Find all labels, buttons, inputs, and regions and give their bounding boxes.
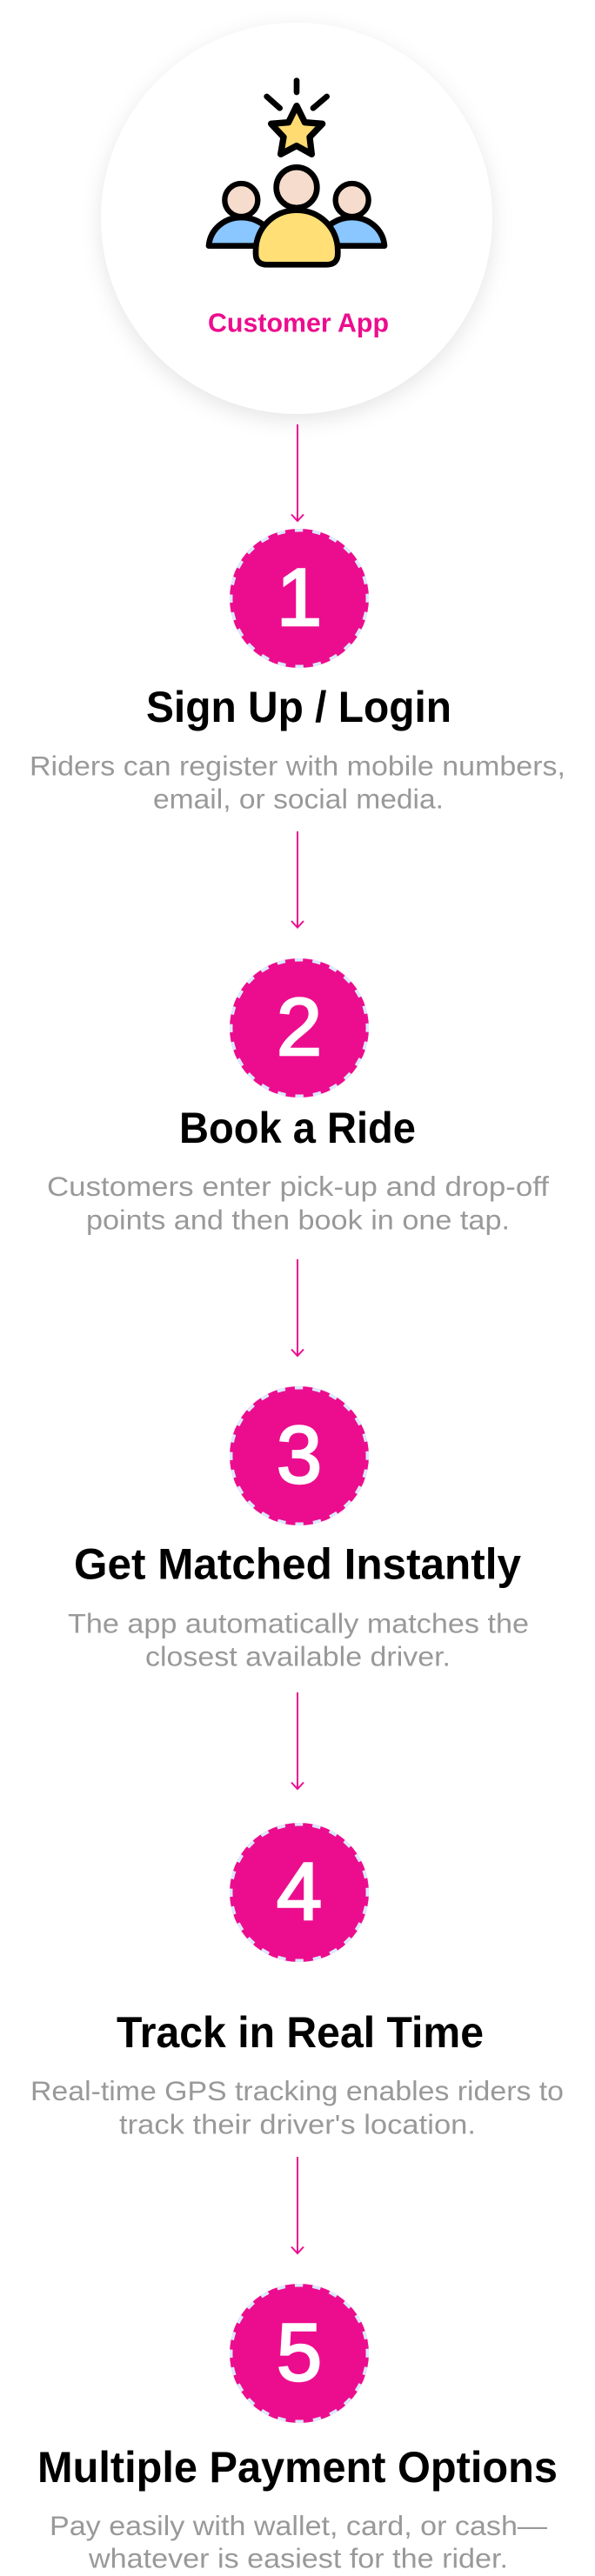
panel: step 3 [68, 1386, 529, 1672]
description: step 2: points and then book in one tap. [86, 1204, 510, 1235]
heading: Get Matched Instantly: Get Matched Instantly [74, 1540, 521, 1589]
badge: number 5 [230, 2284, 369, 2423]
arrow: to step 2 [291, 831, 304, 927]
description: step 5: whatever is easiest for the rider. [88, 2543, 508, 2574]
arrow: to step 3 [291, 1259, 304, 1356]
description: step 1 [30, 751, 565, 814]
badge: number 4: 4 [277, 1845, 322, 1937]
badge: number 1: 1 [277, 551, 322, 643]
arrow: to step 1 [291, 424, 304, 521]
badge: number 3: 3 [277, 1409, 322, 1500]
label: Customer App: Customer App [208, 308, 389, 337]
description: step 2 [47, 1171, 549, 1235]
icon: customers with star [209, 81, 384, 264]
description: step 4: track their driver's location. [119, 2108, 476, 2139]
panel: step 5 [37, 2284, 558, 2574]
panel: customer app circle [101, 23, 492, 414]
badge: number 1 [230, 529, 369, 668]
panel: step 1 [30, 529, 565, 814]
description: step 3: The app automatically matches the [68, 1607, 529, 1638]
description: step 3: closest available driver. [145, 1641, 451, 1672]
description: step 3 [68, 1607, 529, 1672]
badge: number 5: 5 [277, 2306, 322, 2398]
description: step 1: email, or social media. [153, 783, 444, 814]
heading: Track in Real Time: Track in Real Time [117, 2008, 484, 2057]
panel: step 2 [47, 958, 549, 1235]
arrow: to step 5 [291, 2157, 304, 2253]
description: step 2: Customers enter pick-up and drop-off [47, 1171, 549, 1202]
badge: number 2 [230, 958, 369, 1098]
heading: Sign Up / Login: Sign Up / Login [146, 683, 451, 731]
description: step 5: Pay easily with wallet, card, or cash— [50, 2510, 548, 2541]
description: step 4 [30, 2075, 564, 2139]
panel: step 4 [30, 1823, 564, 2139]
description: step 1: Riders can register with mobile numbers, [30, 751, 565, 782]
badge: number 4 [230, 1823, 369, 1962]
description: step 5 [50, 2510, 548, 2574]
heading: Multiple Payment Options: Multiple Payment Options [37, 2443, 558, 2492]
badge: number 2: 2 [277, 981, 322, 1072]
description: step 4: Real-time GPS tracking enables riders to [30, 2075, 564, 2106]
heading: Book a Ride: Book a Ride [179, 1104, 416, 1152]
arrow: to step 4 [291, 1692, 304, 1789]
badge: number 3 [230, 1386, 369, 1525]
